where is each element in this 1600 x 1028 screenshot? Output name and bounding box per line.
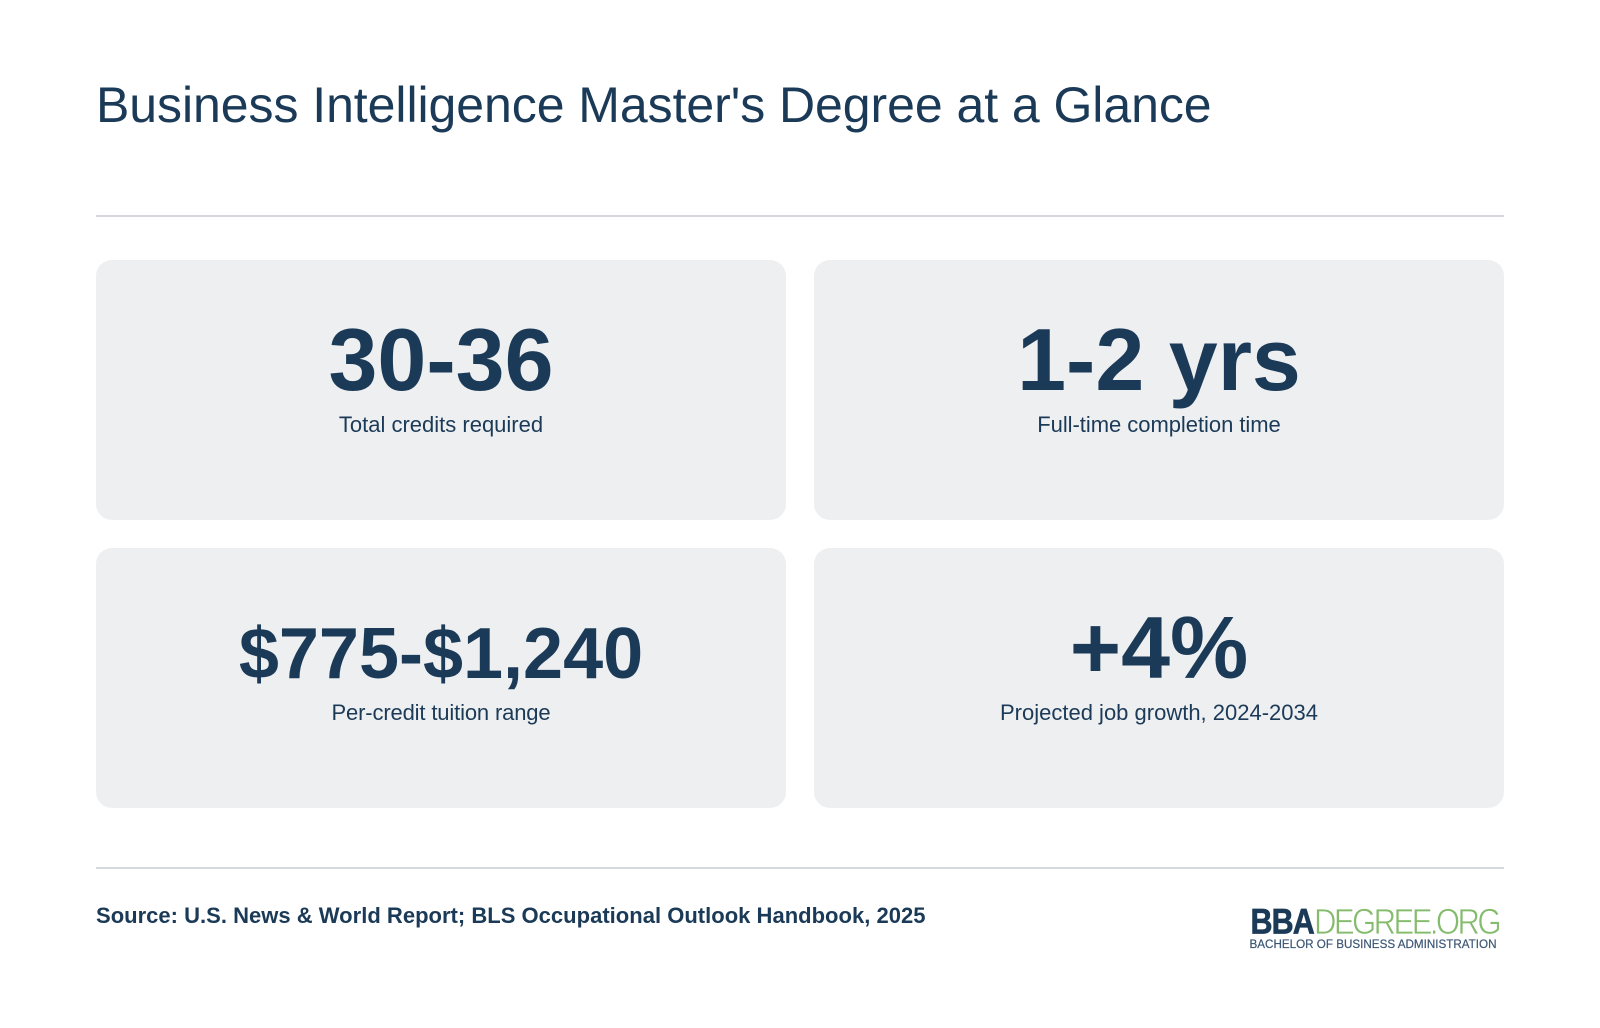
stat: tuition value: $775-$1,240	[239, 614, 643, 694]
label: tuition: Per-credit tuition range	[332, 700, 550, 725]
panel: completion time	[814, 260, 1504, 520]
stat: credits value: 30-36	[328, 310, 554, 409]
logo: BBADegree.org: BBA	[1250, 901, 1314, 941]
title: Business Intelligence Master's Degree at a Glance	[96, 77, 1212, 133]
label: credits: Total credits required	[339, 412, 543, 437]
panel: job growth	[814, 548, 1504, 808]
logo: BBADegree.org: BACHELOR OF BUSINESS ADMINISTRATION	[1250, 939, 1496, 951]
stat: time value: 1-2 yrs	[1017, 310, 1301, 409]
label: growth: Projected job growth, 2024-2034	[1000, 700, 1318, 725]
panel: total credits	[96, 260, 786, 520]
source note: Source: U.S. News & World Report; BLS Occupational Outlook Handbook, 2025	[96, 903, 925, 928]
panel: tuition	[96, 548, 786, 808]
logo: BBADegree.org: DEGREE.ORG	[1314, 903, 1500, 942]
stat: growth value: +4%	[1070, 598, 1248, 697]
logo: BBADegree.org	[1250, 901, 1500, 951]
label: time: Full-time completion time	[1037, 412, 1281, 437]
